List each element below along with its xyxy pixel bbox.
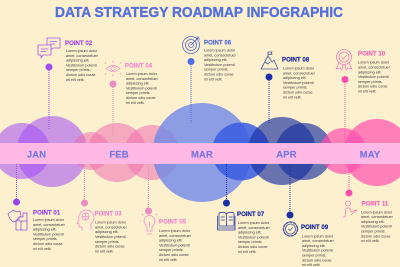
- icon: chat bubbles: [38, 38, 60, 58]
- point 02 text: POINT 02: [65, 40, 93, 47]
- point 09 text: [301, 224, 335, 267]
- point 11 text: amet, consectetuer: [361, 215, 394, 219]
- point 07 text: adipiscing elit.: [238, 231, 262, 235]
- month label: FEB: FEB: [109, 148, 129, 160]
- point 07 text: dictum odio curae: [238, 245, 268, 249]
- point 04 text: amet, consectetuer: [126, 77, 159, 81]
- point 03 text: adipiscing elit.: [95, 230, 119, 234]
- title: DATA STRATEGY ROADMAP INFOGRAPHIC: [55, 4, 343, 21]
- point 08 text: adipiscing elit.: [283, 76, 307, 80]
- point 03 text: Vestibulum potenti: [95, 235, 126, 239]
- point 11 text: Vestibulum potenti: [361, 225, 392, 229]
- point 07 text: amet, consectetuer: [238, 226, 271, 230]
- point 10 text: mi elit velit.: [358, 90, 377, 94]
- point 02 text: dictum odio curae: [66, 73, 96, 77]
- point 04 text: POINT 04: [125, 62, 153, 69]
- point 01 text: adipiscing elit.: [33, 228, 57, 232]
- point 09 text: Vestibulum potenti: [302, 249, 333, 253]
- point 05 text: POINT 05: [159, 218, 187, 225]
- point 08 text: Lorem ipsum dolor: [283, 66, 315, 70]
- point 11 text: Lorem ipsum dolor: [361, 210, 393, 214]
- point 07 text: Vestibulum potenti: [238, 235, 269, 239]
- point 05 text: adipiscing elit.: [159, 239, 183, 243]
- point 06 text: adipiscing elit.: [204, 58, 228, 62]
- icon: mountain flag: [261, 52, 278, 69]
- point 09 text: mi elit velit.: [302, 263, 321, 267]
- point 04 text: mi elit velit.: [126, 101, 145, 105]
- point 09 text: dictum odio curae: [302, 258, 332, 262]
- point 06 text: semper primis.: [204, 68, 229, 72]
- point 05 text: Vestibulum potenti: [159, 243, 190, 247]
- month band: [0, 143, 400, 164]
- point 09 text: amet, consectetuer: [302, 239, 335, 243]
- point 01 text: Lorem ipsum dolor: [33, 218, 65, 222]
- point 02 text: Vestibulum potenti: [66, 63, 97, 67]
- point 11 text: [361, 200, 394, 243]
- point 10 text: [358, 50, 391, 94]
- point 04 text: adipiscing elit.: [126, 82, 150, 86]
- point 11 text: adipiscing elit.: [361, 220, 385, 224]
- point 10 text: POINT 10: [358, 50, 386, 58]
- point 01 text: POINT 01: [33, 209, 61, 216]
- point 03 text: mi elit velit.: [95, 249, 114, 253]
- point 08 text: [282, 56, 316, 99]
- circles: April: [248, 117, 332, 185]
- point 05 text: semper primis.: [159, 248, 184, 252]
- icon: person climbing: [343, 201, 357, 217]
- icon: open book: [218, 212, 235, 230]
- point 09 text: POINT 09: [301, 224, 329, 231]
- point 08 text: Vestibulum potenti: [283, 81, 314, 85]
- point 05 text: mi elit velit.: [159, 258, 178, 262]
- point 01 text: Vestibulum potenti: [33, 232, 64, 236]
- point 07 text: Lorem ipsum dolor: [238, 221, 270, 225]
- point 03 text: amet, consectetuer: [95, 225, 128, 229]
- circles: January: [0, 116, 88, 187]
- point 02 text: Lorem ipsum dolor: [66, 49, 98, 53]
- point 06 text: Lorem ipsum dolor: [204, 48, 236, 52]
- point 05 text: dictum odio curae: [159, 253, 189, 257]
- point 01 text: amet, consectetuer: [33, 223, 66, 227]
- point 04 text: [125, 62, 159, 105]
- point 10 text: dictum odio curae: [358, 85, 388, 89]
- point 06 text: [204, 39, 237, 81]
- point 01 text: mi elit velit.: [33, 247, 52, 251]
- dots: [13, 58, 352, 218]
- point 04 text: Lorem ipsum dolor: [126, 72, 158, 76]
- point 06 text: mi elit velit.: [204, 77, 223, 81]
- point 05 text: amet, consectetuer: [159, 234, 192, 238]
- icon: light bulb: [140, 214, 159, 234]
- icon: target: [182, 36, 200, 54]
- point 10 text: adipiscing elit.: [358, 70, 382, 74]
- point 06 text: amet, consectetuer: [204, 53, 237, 57]
- month label: MAR: MAR: [191, 148, 213, 160]
- point 04 text: semper primis.: [126, 91, 151, 95]
- icon: award rosette: [336, 50, 352, 70]
- point 07 text: POINT 07: [237, 211, 265, 218]
- point 10 text: Lorem ipsum dolor: [358, 61, 390, 65]
- month label: APR: APR: [276, 148, 297, 160]
- circles: May: [320, 119, 400, 186]
- icon: gear: [284, 222, 298, 236]
- point 10 text: Vestibulum potenti: [358, 75, 389, 79]
- point 10 text: amet, consectetuer: [358, 66, 391, 70]
- point 03 text: POINT 03: [94, 210, 122, 217]
- point 06 text: POINT 06: [204, 39, 232, 46]
- point 11 text: dictum odio curae: [361, 234, 391, 238]
- point 11 text: mi elit velit.: [361, 239, 380, 243]
- circles: March: [152, 103, 270, 202]
- point 03 text: Lorem ipsum dolor: [95, 221, 127, 225]
- month label: MAY: MAY: [360, 148, 381, 160]
- point 05 text: Lorem ipsum dolor: [159, 229, 191, 233]
- point 08 text: semper primis.: [283, 86, 308, 90]
- point 08 text: POINT 08: [282, 56, 310, 63]
- point 07 text: mi elit velit.: [238, 250, 257, 254]
- point 11 text: semper primis.: [361, 230, 386, 234]
- point 07 text: semper primis.: [238, 240, 263, 244]
- point 03 text: dictum odio curae: [95, 245, 125, 249]
- point 09 text: adipiscing elit.: [302, 244, 326, 248]
- point 02 text: semper primis.: [66, 68, 91, 72]
- point 07 text: [237, 211, 271, 254]
- point 05 text: [159, 218, 192, 262]
- point 09 text: Lorem ipsum dolor: [302, 234, 334, 238]
- circles: February: [72, 123, 180, 182]
- point 06 text: dictum odio curae: [204, 72, 234, 76]
- point 04 text: Vestibulum potenti: [126, 86, 157, 90]
- point 01 text: dictum odio curae: [33, 242, 63, 246]
- month label: JAN: JAN: [27, 148, 46, 160]
- point 02 text: adipiscing elit.: [66, 59, 90, 63]
- point 08 text: dictum odio curae: [283, 90, 313, 94]
- connector lines: [16, 64, 349, 212]
- point 04 text: dictum odio curae: [126, 96, 156, 100]
- point 10 text: semper primis.: [358, 80, 383, 84]
- point 01 text: semper primis.: [33, 237, 58, 241]
- point 09 text: semper primis.: [302, 254, 327, 258]
- point 08 text: amet, consectetuer: [283, 71, 316, 75]
- icon: head with brain: [77, 210, 94, 230]
- icon: eye: [105, 61, 121, 76]
- point 01 text: [33, 209, 66, 251]
- point 06 text: Vestibulum potenti: [204, 63, 235, 67]
- icon: puzzle: [8, 210, 27, 230]
- point 08 text: mi elit velit.: [283, 95, 302, 99]
- point 11 text: POINT 11: [362, 200, 389, 207]
- point 02 text: mi elit velit.: [66, 78, 85, 82]
- point 03 text: semper primis.: [95, 240, 120, 244]
- point 02 text: amet, consectetuer: [66, 54, 99, 58]
- point 03 text: [94, 210, 128, 253]
- point 02 text: [65, 40, 99, 82]
